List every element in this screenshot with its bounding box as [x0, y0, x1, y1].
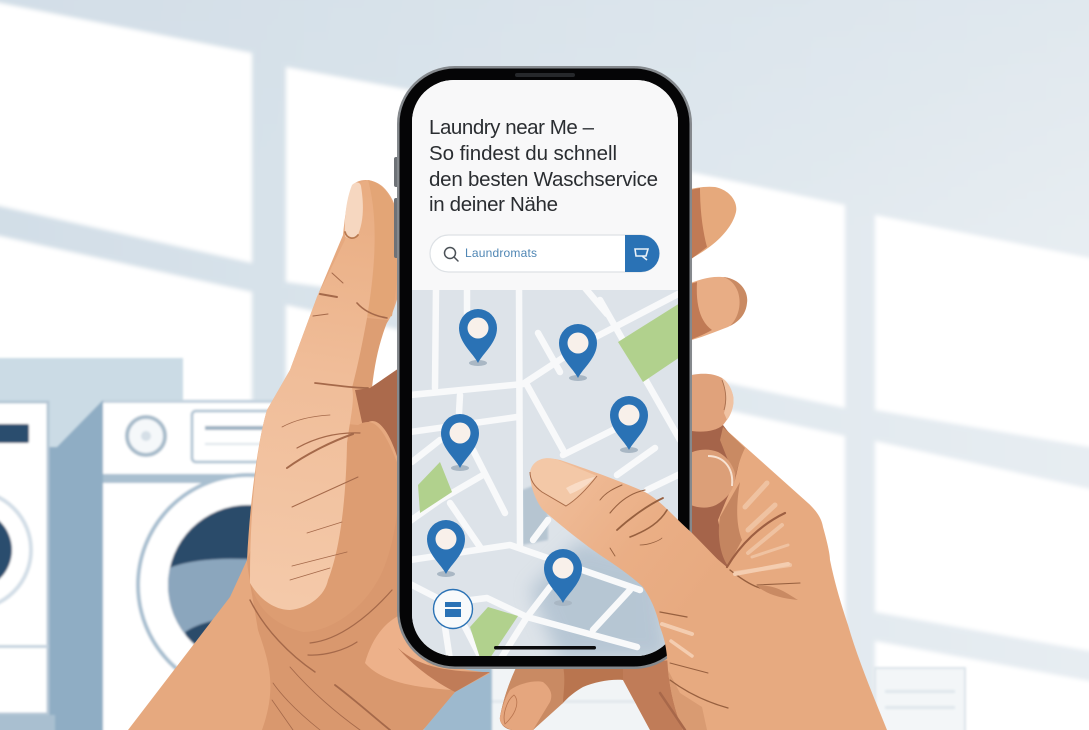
hand dark under-phone patch — [623, 660, 692, 730]
search text: Laundromats — [465, 246, 537, 260]
machine side panel — [48, 400, 103, 730]
title text: den besten Waschservice — [429, 168, 658, 191]
roads — [410, 288, 680, 660]
title text: in deiner Nähe — [429, 193, 558, 216]
thumb highlight — [250, 180, 375, 610]
search button — [625, 235, 660, 272]
phone body — [397, 66, 692, 669]
palm fold tone — [668, 670, 707, 730]
thumb body — [530, 459, 810, 730]
left hand — [128, 180, 490, 730]
map — [410, 288, 680, 660]
search icon — [444, 248, 458, 261]
background: bottom right machine — [875, 668, 965, 730]
thumb right strip — [367, 180, 399, 318]
finger 2 — [685, 277, 746, 342]
thumb highlights — [662, 564, 788, 656]
cabinet behind machines — [0, 358, 183, 408]
background: panel under phone — [492, 668, 692, 730]
dark band under phone — [398, 648, 490, 692]
map pin 2 — [559, 324, 597, 381]
title text: So findest du schnell — [429, 142, 617, 165]
map pin 1 — [459, 309, 497, 366]
knuckle creases and highlights — [727, 483, 790, 573]
web between thumb and fingers — [355, 366, 402, 475]
thumb joint shade — [352, 318, 388, 388]
home indicator — [494, 646, 596, 650]
map pin 3 — [610, 396, 648, 453]
title text: Laundry near Me – — [429, 116, 595, 139]
fold beside fingers — [720, 427, 745, 478]
finger 4 — [685, 450, 735, 508]
thumb creases — [600, 485, 800, 730]
hand base — [128, 180, 490, 730]
background: washing machines — [0, 358, 965, 730]
shadow between fingers — [685, 425, 742, 568]
map pin 4 — [441, 414, 479, 471]
right machine — [102, 399, 272, 730]
phone — [394, 66, 692, 669]
palm patch near phone — [365, 615, 452, 690]
map pin 6 — [544, 549, 582, 606]
lower palm tone — [250, 470, 455, 730]
right hand behind phone — [500, 187, 887, 730]
thumb shadow on map — [530, 540, 670, 660]
thumb nail — [345, 182, 363, 239]
map action button — [434, 590, 472, 628]
finger 3 — [685, 374, 733, 432]
thumb nail — [530, 458, 597, 506]
white header fade — [412, 80, 678, 122]
finger 1 — [685, 187, 736, 262]
lower fingers under phone — [500, 660, 665, 730]
creases — [250, 232, 392, 730]
green parks — [618, 303, 680, 382]
left machine — [0, 402, 55, 730]
back of hand — [623, 427, 887, 730]
thumb muscle ring — [247, 420, 400, 632]
right thumb over phone — [530, 458, 810, 730]
wrist crease patch — [757, 586, 798, 600]
search bar — [430, 235, 660, 272]
map pin 5 — [427, 520, 465, 577]
side buttons — [394, 157, 399, 187]
